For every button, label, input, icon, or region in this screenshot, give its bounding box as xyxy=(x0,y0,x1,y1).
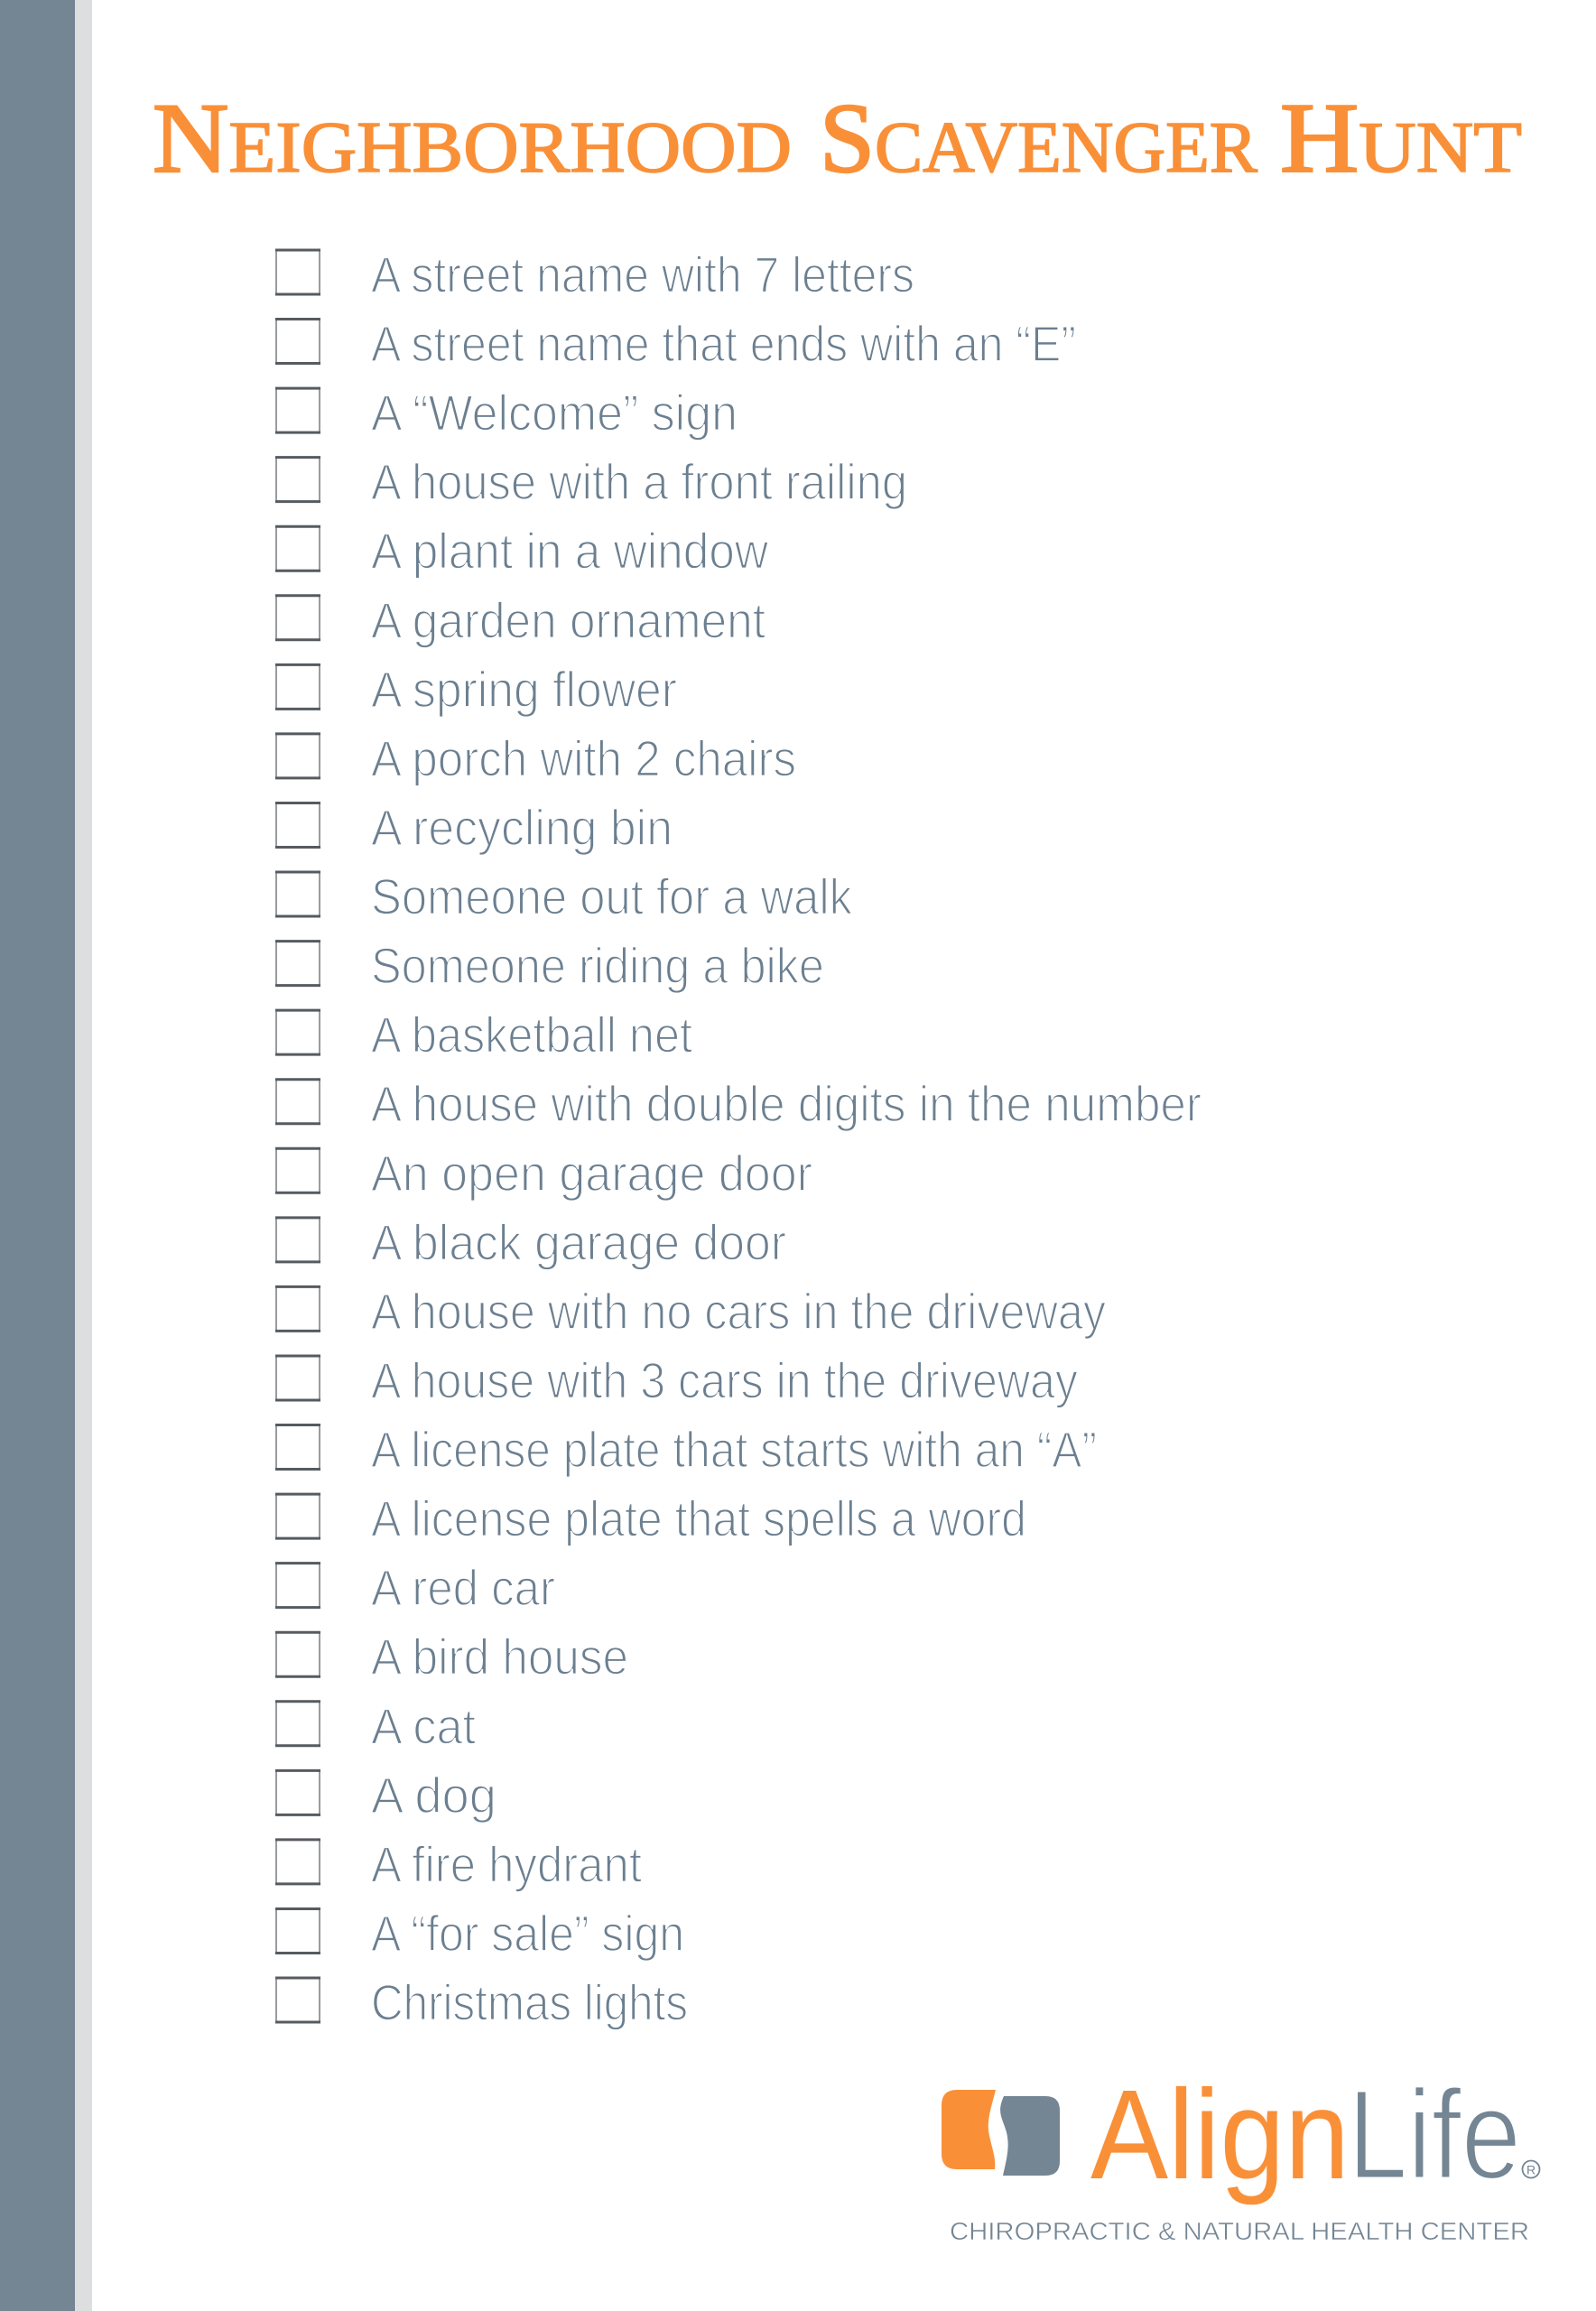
item: front railing: A house with a front railing xyxy=(371,453,907,510)
title: SCAVENGER xyxy=(820,83,1258,193)
item: someone riding a bike: Someone riding a bike xyxy=(371,937,824,994)
title xyxy=(153,83,1522,193)
item: open garage door: An open garage door xyxy=(371,1145,812,1202)
item: red car xyxy=(275,1559,555,1616)
item: red car: A red car xyxy=(371,1559,555,1616)
registered mark: R xyxy=(1526,2163,1536,2177)
item: license plate word: A license plate that spells a word xyxy=(371,1490,1026,1547)
item: fire hydrant: A fire hydrant xyxy=(371,1835,642,1892)
item: fire hydrant xyxy=(275,1835,642,1892)
item: street name with 7 letters: A street name with 7 letters xyxy=(371,246,914,303)
item: cat xyxy=(275,1697,476,1754)
wordmark: Life xyxy=(1348,2063,1521,2205)
item: dog xyxy=(275,1767,496,1824)
item: basketball net: A basketball net xyxy=(371,1007,692,1063)
checklist xyxy=(275,246,1202,2031)
title: HUNT xyxy=(1280,83,1522,193)
item: porch with 2 chairs: A porch with 2 chairs xyxy=(371,729,796,786)
tagline: CHIROPRACTIC & NATURAL HEALTH CENTER xyxy=(950,2217,1529,2245)
registered mark xyxy=(1522,2161,1540,2177)
item: bird house xyxy=(275,1629,628,1685)
item: license plate A: A license plate that starts with an “A” xyxy=(371,1421,1097,1478)
item: welcome sign: A “Welcome” sign xyxy=(371,385,738,441)
item: bird house: A bird house xyxy=(371,1629,628,1685)
logo: AlignLife xyxy=(942,2063,1540,2245)
item: 3 cars: A house with 3 cars in the driveway xyxy=(371,1351,1078,1408)
icon: spine blocks xyxy=(942,2090,1060,2176)
item: double digits: A house with double digits in the number xyxy=(371,1075,1202,1132)
item: someone out for a walk: Someone out for a walk xyxy=(371,868,853,925)
title: NEIGHBORHOOD xyxy=(153,83,792,193)
item: no cars: A house with no cars in the driveway xyxy=(371,1283,1106,1340)
item: for sale sign: A “for sale” sign xyxy=(371,1905,684,1962)
item: dog: A dog xyxy=(371,1767,496,1824)
item: cat: A cat xyxy=(371,1697,476,1754)
sidebar stripe xyxy=(0,0,92,2311)
item: Christmas lights: Christmas lights xyxy=(371,1973,688,2031)
item: plant in a window: A plant in a window xyxy=(371,523,769,580)
item: Christmas lights xyxy=(275,1973,688,2031)
wordmark: Align xyxy=(1090,2063,1350,2205)
wordmark xyxy=(1090,2063,1521,2205)
item: garden ornament: A garden ornament xyxy=(371,591,766,648)
item: recycling bin: A recycling bin xyxy=(371,799,673,856)
item: spring flower: A spring flower xyxy=(371,661,677,718)
item: black garage door: A black garage door xyxy=(371,1213,786,1270)
item: street name ending in E: A street name that ends with an “E” xyxy=(371,315,1076,372)
